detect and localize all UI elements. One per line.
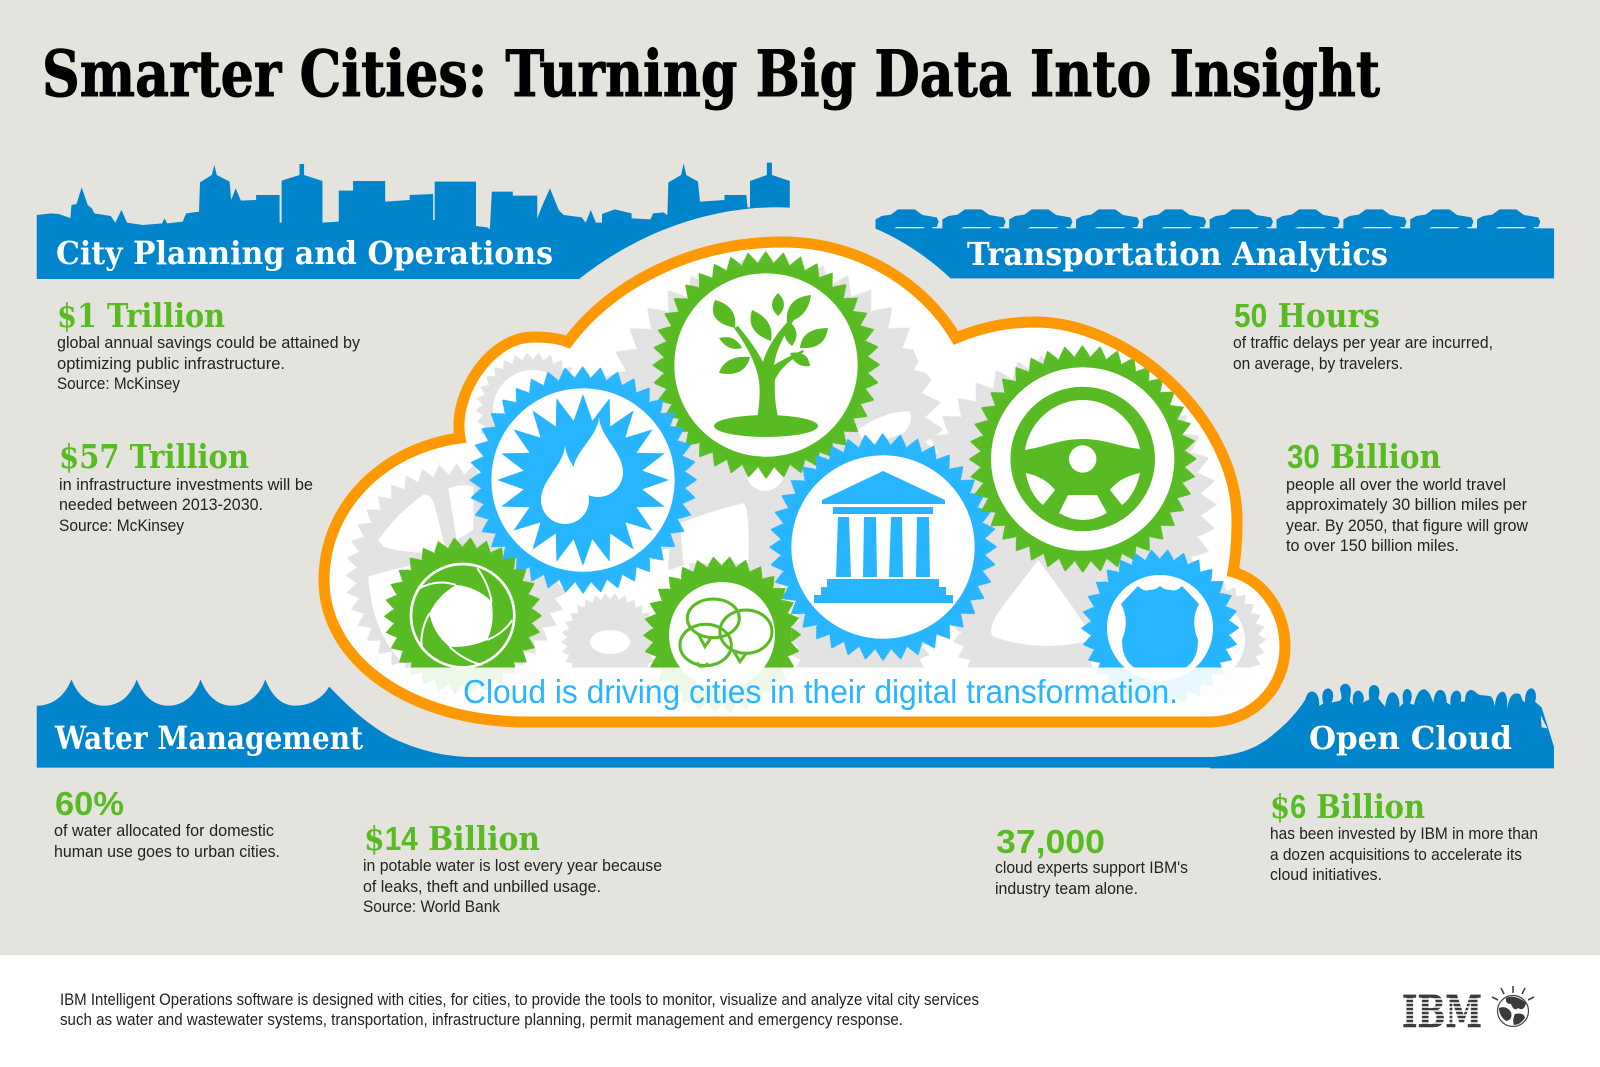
gear: chat bubbles (644, 557, 800, 713)
stat: 50 hours (1233, 296, 1493, 373)
footer text: IBM Intelligent Operations software is designed with cities, for cities, to provide the tools to monitor, visualize and analyze vital city services (60, 991, 979, 1009)
stat: 50 hours: of traffic delays per year are incurred, (1233, 334, 1493, 352)
footer background (0, 955, 1600, 1067)
icon: tree (713, 293, 828, 437)
stat: 60%: 60% (55, 785, 124, 822)
gear: museum building (770, 434, 996, 660)
stat: $6 billion: cloud initiatives. (1270, 866, 1382, 884)
stat: 50 hours: on average, by travelers. (1233, 355, 1403, 373)
banner: city skyline (37, 163, 790, 279)
stat: 30 billion: to over 150 billion miles. (1286, 537, 1459, 555)
faded lower band (406, 668, 1254, 714)
stat: $1 trillion: optimizing public infrastructure. (57, 355, 285, 373)
stat: $14 billion: Source: World Bank (363, 898, 501, 916)
stat: $14 billion: $14 Billion (364, 819, 540, 858)
stat: $6 billion: has been invested by IBM in more than (1270, 825, 1538, 843)
cloud caption: Cloud is driving cities in their digital transformation. (463, 674, 1178, 711)
gear: steering wheel (970, 346, 1196, 572)
stat: $14 billion (363, 819, 662, 916)
banner: row of cars (875, 209, 1554, 278)
banner: waves (37, 679, 800, 768)
stat: $57 trillion: Source: McKinsey (59, 517, 185, 535)
stat: $6 billion (1270, 787, 1538, 884)
grey background gears (346, 258, 1265, 710)
stat: 30 billion: year. By 2050, that figure will grow (1286, 517, 1528, 535)
stat: $57 trillion (59, 437, 313, 535)
heading: open cloud: Open Cloud (1309, 719, 1512, 757)
panel: transportation analytics (875, 209, 1554, 555)
icon: steering wheel (1010, 387, 1155, 531)
banner: crowd of people (800, 684, 1554, 768)
stat: $6 billion: a dozen acquisitions to accelerate its (1270, 846, 1522, 864)
heading: city planning: City Planning and Operations (56, 234, 553, 272)
cloud outline (324, 242, 1285, 722)
gear: water (470, 367, 696, 593)
footer text (60, 991, 979, 1029)
stat: $1 trillion: global annual savings could be attained by (57, 334, 361, 352)
stat: 37,000: 37,000 (996, 823, 1105, 860)
stat: 30 billion (1286, 437, 1528, 555)
stat: 30 billion: 30 Billion (1287, 437, 1441, 476)
stat: 60% (54, 785, 280, 861)
footer text: such as water and wastewater systems, transportation, infrastructure planning, permit management and emergency response. (60, 1011, 903, 1029)
stat: $57 trillion: $57 Trillion (59, 437, 249, 476)
stat: $1 trillion: $1 Trillion (57, 296, 225, 335)
stat: $57 trillion: in infrastructure investments will be (59, 476, 313, 494)
panel: water management (37, 679, 800, 916)
stat: $57 trillion: needed between 2013-2030. (59, 496, 263, 514)
stat: 37,000: cloud experts support IBM's (995, 859, 1188, 877)
stat: 37,000 (995, 823, 1188, 898)
panel: city planning and operations (37, 163, 790, 535)
icon: civic building (814, 471, 953, 603)
gear: tree (653, 252, 879, 478)
stat: 30 billion: people all over the world travel (1286, 476, 1506, 494)
stat: $14 billion: of leaks, theft and unbilled usage. (363, 878, 601, 896)
stat: 60%: human use goes to urban cities. (54, 843, 280, 861)
icon: aperture blades (411, 564, 514, 667)
gear: aperture (385, 538, 541, 694)
stat: $6 billion: $6 Billion (1270, 787, 1425, 826)
stat: 60%: of water allocated for domestic (54, 822, 274, 840)
stat: 50 hours: 50 Hours (1234, 296, 1380, 335)
icon: water burst and drops (497, 394, 669, 566)
IBM logo: IBM (1402, 987, 1482, 1038)
stat: $14 billion: in potable water is lost every year because (363, 857, 662, 875)
stat: $1 trillion (57, 296, 361, 393)
stat: 37,000: industry team alone. (995, 880, 1138, 898)
stat: $1 trillion: Source: McKinsey (57, 375, 181, 393)
icon: shield (1121, 586, 1199, 668)
cloud fill (324, 242, 1285, 722)
cloud with gears (300, 242, 1300, 728)
gear: shield (1082, 550, 1238, 706)
heading: transportation: Transportation Analytics (967, 235, 1388, 273)
icon: chat bubbles (680, 599, 772, 668)
heading: water: Water Management (54, 719, 363, 757)
footer (0, 955, 1600, 1067)
stat: 30 billion: approximately 30 billion miles per (1286, 496, 1527, 514)
panel: open cloud (800, 684, 1554, 898)
